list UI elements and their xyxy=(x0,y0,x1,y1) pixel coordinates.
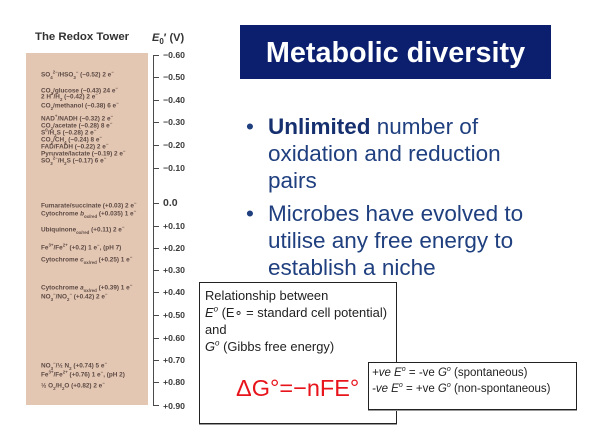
bullet: unlimited pairs xyxy=(246,114,501,193)
voltage axis with ticks and values: −0.50 xyxy=(163,72,185,82)
voltage axis with ticks and values: +0.60 xyxy=(163,333,185,343)
title banner: Metabolic diversity xyxy=(266,37,525,69)
redox couples list: Fe3+/Fe2+ (+0.76) 1 e−, (pH 2) xyxy=(41,369,125,379)
redox couples list: CO2/CH4 (−0.24) 8 e− xyxy=(41,134,102,145)
redox couples list: FAD/FADH (−0.22) 2 e− xyxy=(41,141,108,151)
bullet: unlimited pairs: oxidation and reduction xyxy=(268,141,501,166)
relationship text: Go (Gibbs free energy) xyxy=(205,339,334,354)
voltage axis with ticks and values: 0.0 xyxy=(163,197,178,209)
redox couples list: ½ O2/H2O (+0.82) 2 e− xyxy=(41,380,105,391)
redox couples list: CO2/glucose (−0.43) 24 e− xyxy=(41,85,118,96)
voltage axis with ticks and values: +0.20 xyxy=(163,243,185,253)
voltage axis with ticks and values: −0.30 xyxy=(163,117,185,127)
title banner xyxy=(240,25,551,79)
redox couples list xyxy=(41,69,136,391)
spontaneity box: -ve Eo = +ve Go (non-spontaneous) xyxy=(372,382,551,394)
bullet: unlimited pairs: Unlimited number of xyxy=(268,114,478,139)
redox couples list: SO32−/H2S (−0.17) 6 e− xyxy=(41,155,106,166)
tan tower column xyxy=(26,53,148,405)
redox couples list: S0/H2S (−0.28) 2 e− xyxy=(41,127,96,138)
equation: ΔG°=−nFE° xyxy=(236,375,359,401)
voltage axis with ticks and values xyxy=(153,50,185,411)
bullet: unlimited pairs: • xyxy=(246,114,254,139)
redox couples list: Ubiquinoneox/red (+0.11) 2 e− xyxy=(41,224,124,235)
redox couples list: Cytochrome box/red (+0.035) 1 e− xyxy=(41,208,136,219)
bullet: microbes evolved xyxy=(246,201,523,280)
voltage axis with ticks and values: −0.10 xyxy=(163,163,185,173)
relationship text: and xyxy=(205,322,227,337)
spontaneity box xyxy=(368,362,577,410)
redox couples list: Fumarate/succinate (+0.03) 2 e− xyxy=(41,200,136,210)
redox couples list: Cytochrome aox/red (+0.39) 1 e− xyxy=(41,282,132,293)
redox couples list: CO2/methanol (−0.38) 6 e− xyxy=(41,100,119,111)
voltage axis with ticks and values: +0.80 xyxy=(163,377,185,387)
voltage axis with ticks and values: −0.20 xyxy=(163,140,185,150)
voltage axis with ticks and values: −0.40 xyxy=(163,95,185,105)
redox couples list: SO42−/HSO3− (−0.52) 2 e− xyxy=(41,69,114,80)
voltage axis with ticks and values: +0.10 xyxy=(163,221,185,231)
redox couples list: 2 H+/H2 (−0.42) 2 e− xyxy=(41,91,98,102)
bullet: microbes evolved: Microbes have evolved to xyxy=(268,201,523,226)
voltage axis with ticks and values: +0.30 xyxy=(163,265,185,275)
voltage axis with ticks and values: −0.60 xyxy=(163,50,185,60)
tower title: The Redox Tower xyxy=(35,31,129,43)
voltage axis with ticks and values: +0.90 xyxy=(163,401,185,411)
relationship box xyxy=(199,282,397,424)
bullet: microbes evolved: • xyxy=(246,201,254,226)
spontaneity box: +ve Eo = -ve Go (spontaneous) xyxy=(372,366,528,379)
bullet: unlimited pairs: pairs xyxy=(268,168,317,193)
redox couples list: NO3−/NO2− (+0.42) 2 e− xyxy=(41,291,107,302)
axis heading: E0′ (V) xyxy=(152,32,184,46)
voltage axis with ticks and values: +0.70 xyxy=(163,355,185,365)
redox couples list: Cytochrome cox/red (+0.25) 1 e− xyxy=(41,254,132,265)
redox couples list: NAD+/NADH (−0.32) 2 e− xyxy=(41,113,113,123)
redox couples list: Pyruvate/lactate (−0.19) 2 e− xyxy=(41,148,125,158)
voltage axis with ticks and values: +0.40 xyxy=(163,287,185,297)
relationship text xyxy=(205,288,387,354)
redox couples list: NO3−/½ N2 (+0.74) 5 e− xyxy=(41,360,107,371)
bullet: microbes evolved: utilise any free energy to xyxy=(268,228,513,253)
bullet: microbes evolved: establish a niche xyxy=(268,255,436,280)
relationship text: Relationship between xyxy=(205,288,328,303)
voltage axis with ticks and values: +0.50 xyxy=(163,310,185,320)
redox couples list: CO2/acetate (−0.28) 8 e− xyxy=(41,120,112,131)
redox couples list: Fe3+/Fe2+ (+0.2) 1 e−, (pH 7) xyxy=(41,242,121,252)
relationship text: Eo (E∘ = standard cell potential) xyxy=(205,305,387,320)
